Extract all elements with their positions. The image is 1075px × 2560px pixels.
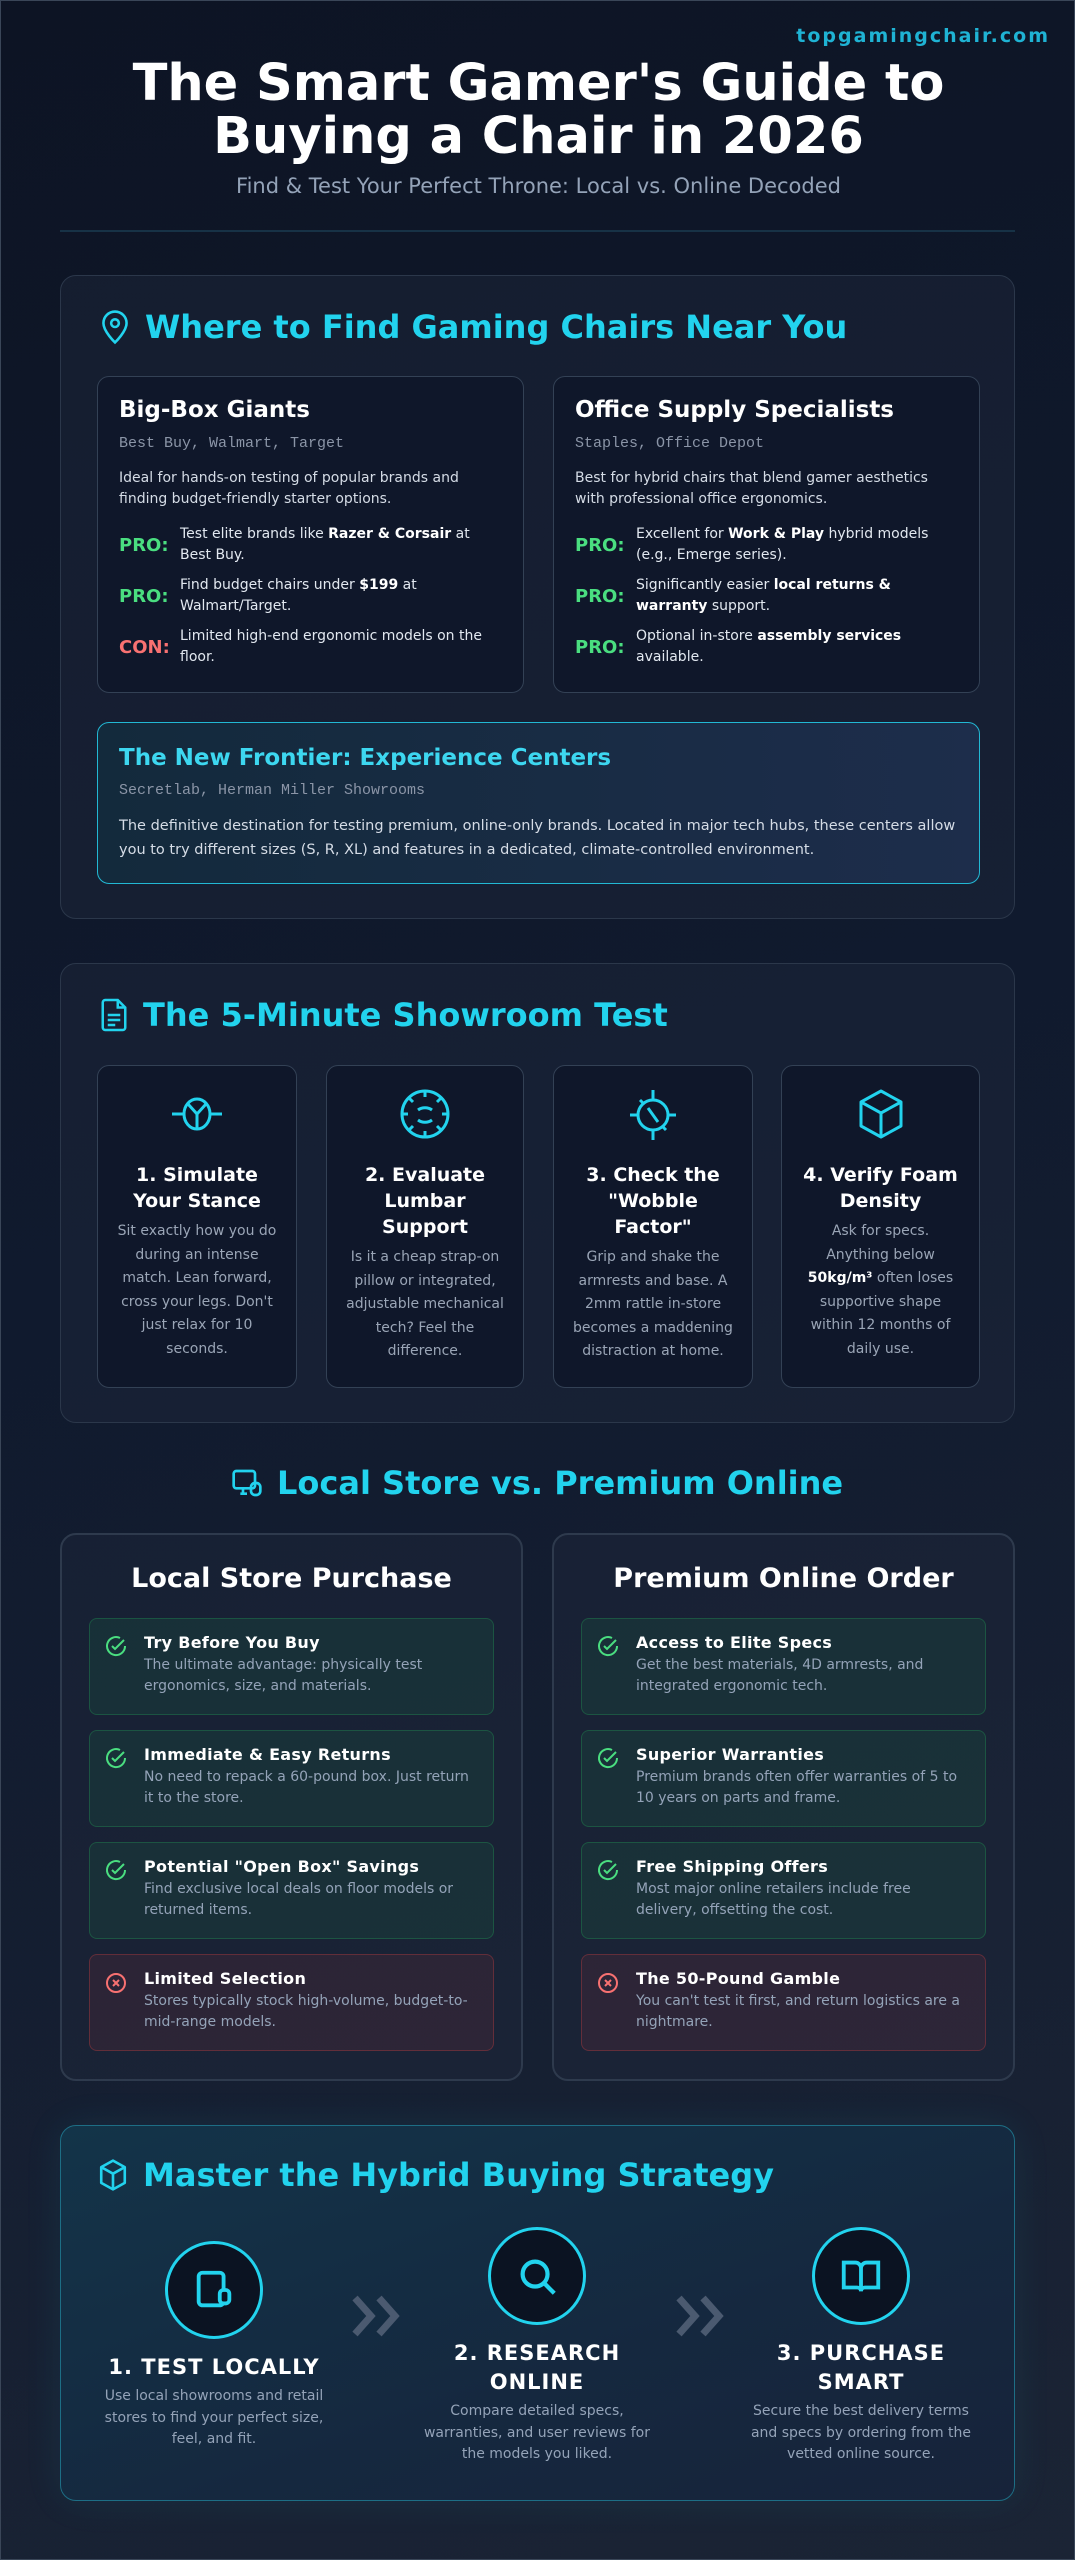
panel: local store purchase: Local Store Purchase (131, 1563, 452, 1594)
item: elite specs (581, 1618, 986, 1715)
arrow (676, 2296, 724, 2336)
callout: experience centers: The New Frontier: Experience Centers (119, 745, 611, 771)
card: foam density (781, 1065, 980, 1388)
panel: local store purchase (60, 1533, 523, 2081)
icon: devices (232, 1470, 262, 1496)
step: purchase smart: 3. PURCHASE (777, 2341, 945, 2365)
item: returns: Immediate & Easy Returns (144, 1745, 391, 1764)
item: elite specs: Access to Elite Specs (636, 1633, 832, 1652)
item: 50-pound gamble: You can't test it first, and return logistics are a nightmare. (636, 1993, 960, 2030)
panel: where to find (60, 275, 1015, 919)
card: office supply: Office Supply Specialists (575, 397, 894, 423)
card: wobble: 3. Check the "Wobble Factor" (586, 1164, 720, 1238)
card: big-box giants: Best Buy, Walmart, Target (119, 435, 344, 452)
item: returns (89, 1730, 494, 1827)
item: limited selection (89, 1954, 494, 2051)
item: returns: No need to repack a 60-pound box. Just return it to the store. (144, 1769, 469, 1806)
item: warranties: Premium brands often offer warranties of 5 to 10 years on parts and frame. (636, 1769, 957, 1806)
card: big-box giants (97, 376, 524, 693)
card: office supply: Best for hybrid chairs that blend gamer aesthetics with professional office ergonomics. (575, 470, 928, 507)
title: Buying a Chair in 2026 (213, 107, 864, 166)
card: big-box giants: Find budget chairs under $199 at Walmart/Target. (180, 577, 417, 614)
heading: hybrid strategy: Master the Hybrid Buying Strategy (143, 2156, 774, 2194)
card: simulate stance (97, 1065, 297, 1388)
item: try before you buy: The ultimate advantage: physically test ergonomics, size, and materials. (144, 1657, 422, 1694)
item: warranties: Superior Warranties (636, 1745, 824, 1764)
card: big-box giants: PRO: (119, 586, 169, 606)
card: office supply: Excellent for Work & Play hybrid models (e.g., Emerge series). (636, 526, 928, 563)
item: free shipping: Most major online retailers include free delivery, offsetting the cost. (636, 1881, 911, 1918)
callout: experience centers: The definitive destination for testing premium, online-only brands. Located in major tech hubs, these centers allow you to try different sizes (S, R, XL) and features in a dedicated, climate-controlled environment. (119, 818, 955, 858)
item: limited selection: Stores typically stock high-volume, budget-to-mid-range models. (144, 1993, 468, 2030)
arrow (352, 2296, 400, 2336)
icon: lumbar (400, 1090, 450, 1138)
item: open box: Find exclusive local deals on floor models or returned items. (144, 1881, 453, 1918)
item: try before you buy: Try Before You Buy (144, 1633, 320, 1652)
step: research online: Compare detailed specs, warranties, and user reviews for the models you liked. (424, 2403, 650, 2462)
step: test locally (105, 2241, 323, 2447)
heading: local vs online: Local Store vs. Premium Online (277, 1464, 843, 1502)
item: limited selection: Limited Selection (144, 1969, 306, 1988)
card: simulate stance: 1. Simulate Your Stance (133, 1164, 261, 1212)
panel: premium online order: Premium Online Order (613, 1563, 954, 1594)
card: big-box giants: Big-Box Giants (119, 397, 310, 423)
step: purchase smart (751, 2227, 971, 2462)
step: research online: 2. RESEARCH (454, 2341, 620, 2365)
subtitle: Find & Test Your Perfect Throne: Local vs. Online Decoded (236, 174, 841, 198)
card: big-box giants: CON: (119, 636, 170, 658)
title: The Smart Gamer's Guide to (133, 54, 944, 113)
card: big-box giants: Limited high-end ergonomic models on the floor. (180, 628, 482, 665)
item: free shipping (581, 1842, 986, 1939)
item: try before you buy (89, 1618, 494, 1715)
card: office supply: PRO: (575, 534, 625, 556)
card: foam density: Ask for specs. Anything below 50kg/m³ often loses supportive shape within 12 months of daily use. (808, 1223, 953, 1356)
card: office supply (553, 376, 980, 693)
card: wobble: Grip and shake the armrests and base. A 2mm rattle in-store becomes a maddening distraction at home. (573, 1249, 733, 1359)
card: lumbar: Is it a cheap strap-on pillow or integrated, adjustable mechanical tech? Feel the difference. (346, 1249, 504, 1359)
card: big-box giants: PRO: (119, 534, 169, 556)
card: office supply: Optional in-store assembly services available. (636, 628, 901, 665)
domain label: topgamingchair.com (796, 25, 1050, 47)
heading: where to find: Where to Find Gaming Chairs Near You (145, 308, 847, 346)
step: research online (424, 2227, 650, 2462)
icon: wobble (630, 1090, 676, 1140)
card: foam density: 4. Verify Foam Density (803, 1164, 958, 1212)
item: free shipping: Free Shipping Offers (636, 1857, 828, 1876)
icon: cube (860, 1090, 902, 1138)
panel: hybrid strategy (60, 2125, 1015, 2501)
panel: showroom test (60, 963, 1015, 1423)
step: test locally: 1. TEST LOCALLY (108, 2355, 320, 2379)
icon: map pin (102, 310, 128, 344)
icon: cube outline (100, 2159, 126, 2191)
item: open box (89, 1842, 494, 1939)
card: office supply: Significantly easier local returns & warranty support. (636, 577, 891, 614)
callout: experience centers: Secretlab, Herman Miller Showrooms (119, 782, 425, 799)
step: purchase smart: Secure the best delivery terms and specs by ordering from the vetted online source. (751, 2403, 971, 2462)
item: open box: Potential "Open Box" Savings (144, 1857, 419, 1876)
step: test locally: Use local showrooms and retail stores to find your perfect size, feel, and fit. (105, 2388, 323, 2447)
icon: document (102, 998, 126, 1032)
card: big-box giants: Test elite brands like Razer & Corsair at Best Buy. (180, 526, 470, 563)
card: big-box giants: Ideal for hands-on testing of popular brands and finding budget-friendly starter options. (119, 470, 459, 507)
step: purchase smart: SMART (818, 2370, 904, 2394)
item: warranties (581, 1730, 986, 1827)
card: office supply: Staples, Office Depot (575, 435, 764, 452)
icon: stance (172, 1098, 222, 1130)
panel: premium online order (552, 1533, 1015, 2081)
card: lumbar (326, 1065, 524, 1388)
callout: experience centers (97, 722, 980, 884)
card: wobble (553, 1065, 753, 1388)
card: lumbar: 2. Evaluate Lumbar Support (365, 1164, 485, 1238)
heading: showroom test: The 5-Minute Showroom Test (143, 996, 668, 1034)
title (132, 54, 944, 166)
item: 50-pound gamble: The 50-Pound Gamble (636, 1969, 840, 1988)
card: office supply: PRO: (575, 586, 625, 606)
card: simulate stance: Sit exactly how you do during an intense match. Lean forward, cross your legs. Don't just relax for 10 seconds. (118, 1223, 276, 1356)
item: elite specs: Get the best materials, 4D armrests, and integrated ergonomic tech. (636, 1657, 923, 1694)
item: 50-pound gamble (581, 1954, 986, 2051)
step: research online: ONLINE (490, 2370, 584, 2394)
card: office supply: PRO: (575, 636, 625, 658)
